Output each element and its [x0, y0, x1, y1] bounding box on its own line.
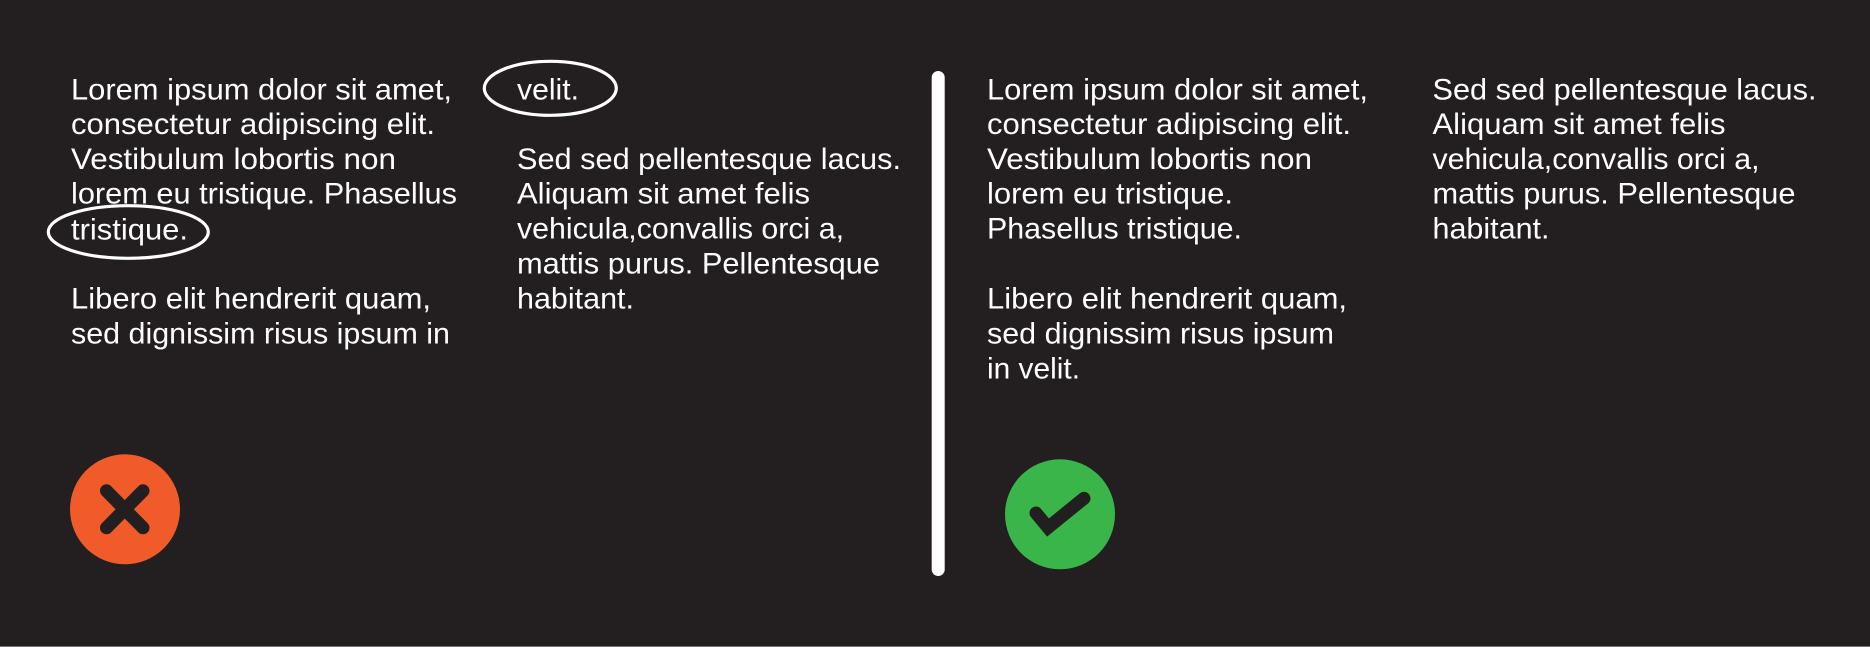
text block: incorrect column 2: velit. — [517, 73, 579, 106]
divider: vertical white bar — [932, 71, 945, 576]
panel: correct example — [987, 73, 1816, 569]
text block: incorrect column 1: Libero elit hendrerit quam, — [71, 283, 431, 316]
text block: incorrect column 1: consectetur adipiscing elit. — [71, 108, 435, 141]
text block: correct column 2: mattis purus. Pellentesque — [1432, 178, 1796, 210]
text block: incorrect column 1: tristique. — [71, 214, 188, 247]
text block: correct column 1: Phasellus tristique. — [987, 212, 1242, 246]
text block: incorrect column 1: lorem eu tristique. Phasellus — [71, 178, 457, 211]
text block: correct column 2: Sed sed pellentesque lacus. — [1432, 73, 1816, 106]
text block: incorrect column 2: mattis purus. Pellentesque — [517, 248, 880, 280]
text block: incorrect column 2: habitant. — [517, 282, 634, 315]
text block: incorrect column 2: Aliquam sit amet felis — [517, 178, 810, 211]
text block: correct column 1: Vestibulum lobortis non — [987, 143, 1312, 176]
text block: correct column 1: in velit. — [987, 352, 1080, 385]
text block: incorrect column 2 — [517, 73, 901, 315]
text block: incorrect column 2: Sed sed pellentesque lacus. — [517, 143, 901, 176]
callout: ellipse around orphan word — [48, 206, 208, 258]
panel: incorrect example — [48, 61, 901, 564]
text block: correct column 2: vehicula,convallis orci a, — [1432, 143, 1760, 176]
text block: incorrect column 2: vehicula,convallis orci a, — [517, 213, 844, 246]
icon: red cross — [70, 454, 180, 564]
callout: ellipse around widow word — [484, 61, 616, 115]
text block: incorrect column 1: Lorem ipsum dolor sit amet, — [71, 73, 452, 106]
text block: correct column 1 — [987, 73, 1368, 385]
icon: green check — [1005, 459, 1115, 569]
text block: incorrect column 1: sed dignissim risus ipsum in — [71, 317, 450, 350]
text block: correct column 2: habitant. — [1432, 212, 1550, 246]
text block: correct column 2 — [1432, 73, 1816, 246]
text block: incorrect column 1 — [71, 73, 457, 350]
text block: incorrect column 1: Vestibulum lobortis non — [71, 143, 396, 176]
text block: correct column 1: consectetur adipiscing elit. — [987, 108, 1351, 141]
text block: correct column 1: lorem eu tristique. — [987, 178, 1233, 210]
text block: correct column 2: Aliquam sit amet felis — [1432, 108, 1726, 141]
text block: correct column 1: sed dignissim risus ipsum — [987, 317, 1334, 350]
text block: correct column 1: Lorem ipsum dolor sit amet, — [987, 73, 1368, 106]
text block: correct column 1: Libero elit hendrerit quam, — [987, 282, 1347, 316]
